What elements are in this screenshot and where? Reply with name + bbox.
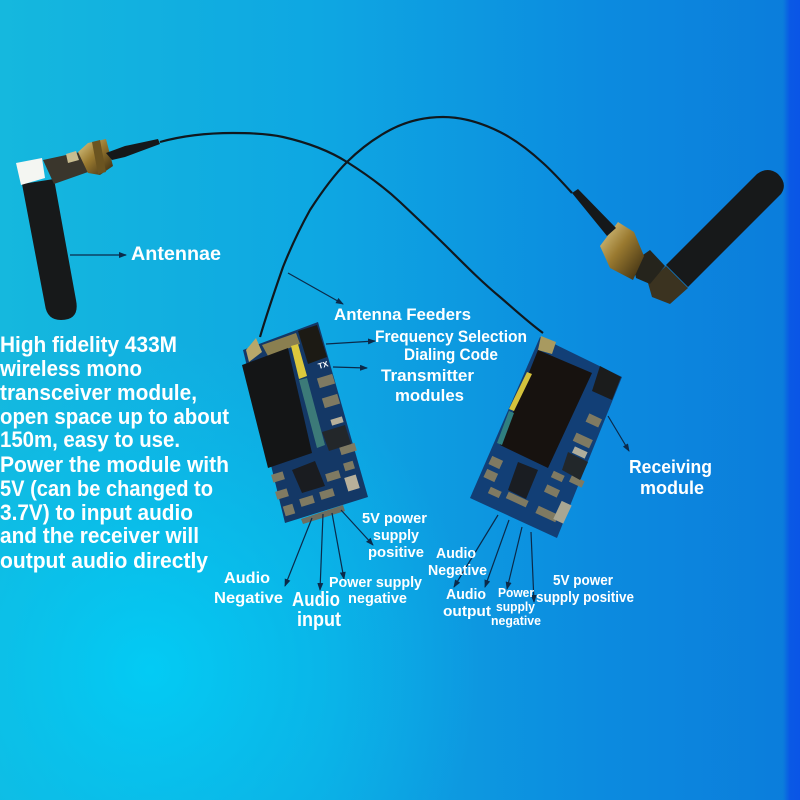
label: Audio output [443, 586, 491, 620]
green strip [497, 411, 514, 445]
label: Frequency Selection Dialing Code: Dialing Code [404, 345, 498, 364]
TX label: TX [317, 359, 330, 371]
label: Audio Negative (receiver): Negative [428, 562, 487, 579]
label: 5V power supply positive (transmitter): supply [373, 527, 420, 544]
label: Antenna Feeders: Antenna Feeders [334, 305, 471, 324]
DIP switch [592, 366, 621, 400]
cable sleeve [106, 139, 160, 160]
description text: 5V (can be changed to [0, 476, 213, 501]
label: Transmitter modules: modules [395, 386, 464, 405]
label: Transmitter modules: Transmitter [381, 366, 474, 385]
description text: wireless mono [0, 356, 142, 381]
IC chip [292, 461, 325, 493]
label: 5V power supply positive (transmitter): 5V power [362, 510, 427, 527]
label: Audio input: input [297, 609, 341, 631]
description text: High fidelity 433M [0, 332, 177, 357]
label: Transmitter modules [381, 366, 474, 405]
cable: left antenna to receiving module [160, 133, 543, 333]
description text: 3.7V) to input audio [0, 500, 193, 525]
label: Audio Negative (receiver) [428, 545, 487, 579]
label: Audio Negative (transmitter): Negative [214, 590, 283, 607]
components [483, 413, 602, 522]
regulator [322, 425, 351, 451]
label: 5V power supply positive (transmitter): positive [368, 544, 424, 561]
hex nut [633, 250, 665, 284]
label: Receiving module: module [640, 478, 704, 498]
description text: 150m, easy to use. [0, 427, 180, 452]
description text: transceiver module, [0, 380, 197, 405]
label: Power supply negative (transmitter) [329, 574, 423, 607]
label: Audio output: Audio [446, 586, 486, 603]
label: Audio input: Audio [292, 589, 340, 611]
DIP switch [298, 325, 327, 364]
left antenna [16, 139, 160, 320]
board [243, 322, 368, 523]
receiving module [470, 336, 622, 538]
elbow [648, 266, 688, 304]
cable: right antenna to transmitter module [260, 117, 572, 337]
white elbow [16, 158, 45, 185]
antenna body [22, 179, 77, 320]
antenna socket [246, 338, 262, 362]
antenna body [666, 170, 784, 287]
transmitter module [242, 322, 368, 524]
gold connector [600, 222, 644, 280]
label: Audio Negative (transmitter): Audio [224, 570, 270, 587]
label: Audio output: output [443, 603, 491, 620]
label: Power supply negative (transmitter): Power supply [329, 574, 423, 591]
label: Frequency Selection Dialing Code [375, 327, 527, 364]
description text: open space up to about [0, 404, 230, 429]
label: Audio Negative (receiver): Audio [436, 545, 476, 562]
label: Power supply negative (transmitter): negative [348, 590, 407, 607]
label: Frequency Selection Dialing Code: Frequency Selection [375, 327, 527, 346]
description text: Power the module with [0, 452, 229, 477]
components [271, 374, 360, 516]
label: Power supply negative (receiver): negative [491, 613, 541, 628]
label: 5V power supply positive (receiver) [536, 573, 634, 606]
label: Audio input [292, 589, 341, 631]
header pads [262, 333, 300, 356]
label: Power supply negative (receiver): supply [496, 599, 536, 614]
description text: and the receiver will [0, 523, 199, 548]
label: 5V power supply positive (transmitter) [362, 510, 427, 561]
gold connector [43, 139, 113, 184]
yellow strip [509, 372, 532, 411]
shield can [242, 348, 312, 468]
cable sleeve [572, 189, 616, 236]
label: Receiving module: Receiving [629, 457, 712, 477]
label: 5V power supply positive (receiver): 5V power [553, 573, 613, 589]
right antenna [572, 170, 784, 304]
IC chip [508, 462, 538, 499]
label: 5V power supply positive (receiver): supply positive [536, 590, 634, 606]
label: Antennae: Antennae [131, 244, 221, 265]
green strip [299, 378, 325, 448]
label: Power supply negative (receiver): Power [498, 585, 534, 600]
yellow strip [291, 344, 307, 379]
regulator [562, 452, 588, 480]
description text [0, 332, 230, 573]
antenna socket [538, 336, 556, 354]
label: Receiving module [629, 457, 712, 498]
pin row [301, 505, 345, 524]
shield can [500, 350, 592, 468]
description text: output audio directly [0, 548, 209, 573]
label: Audio Negative (transmitter) [214, 570, 283, 607]
crystal [553, 501, 572, 524]
leader arrows [70, 255, 629, 602]
board [470, 337, 622, 538]
label: Power supply negative (receiver) [491, 585, 541, 628]
